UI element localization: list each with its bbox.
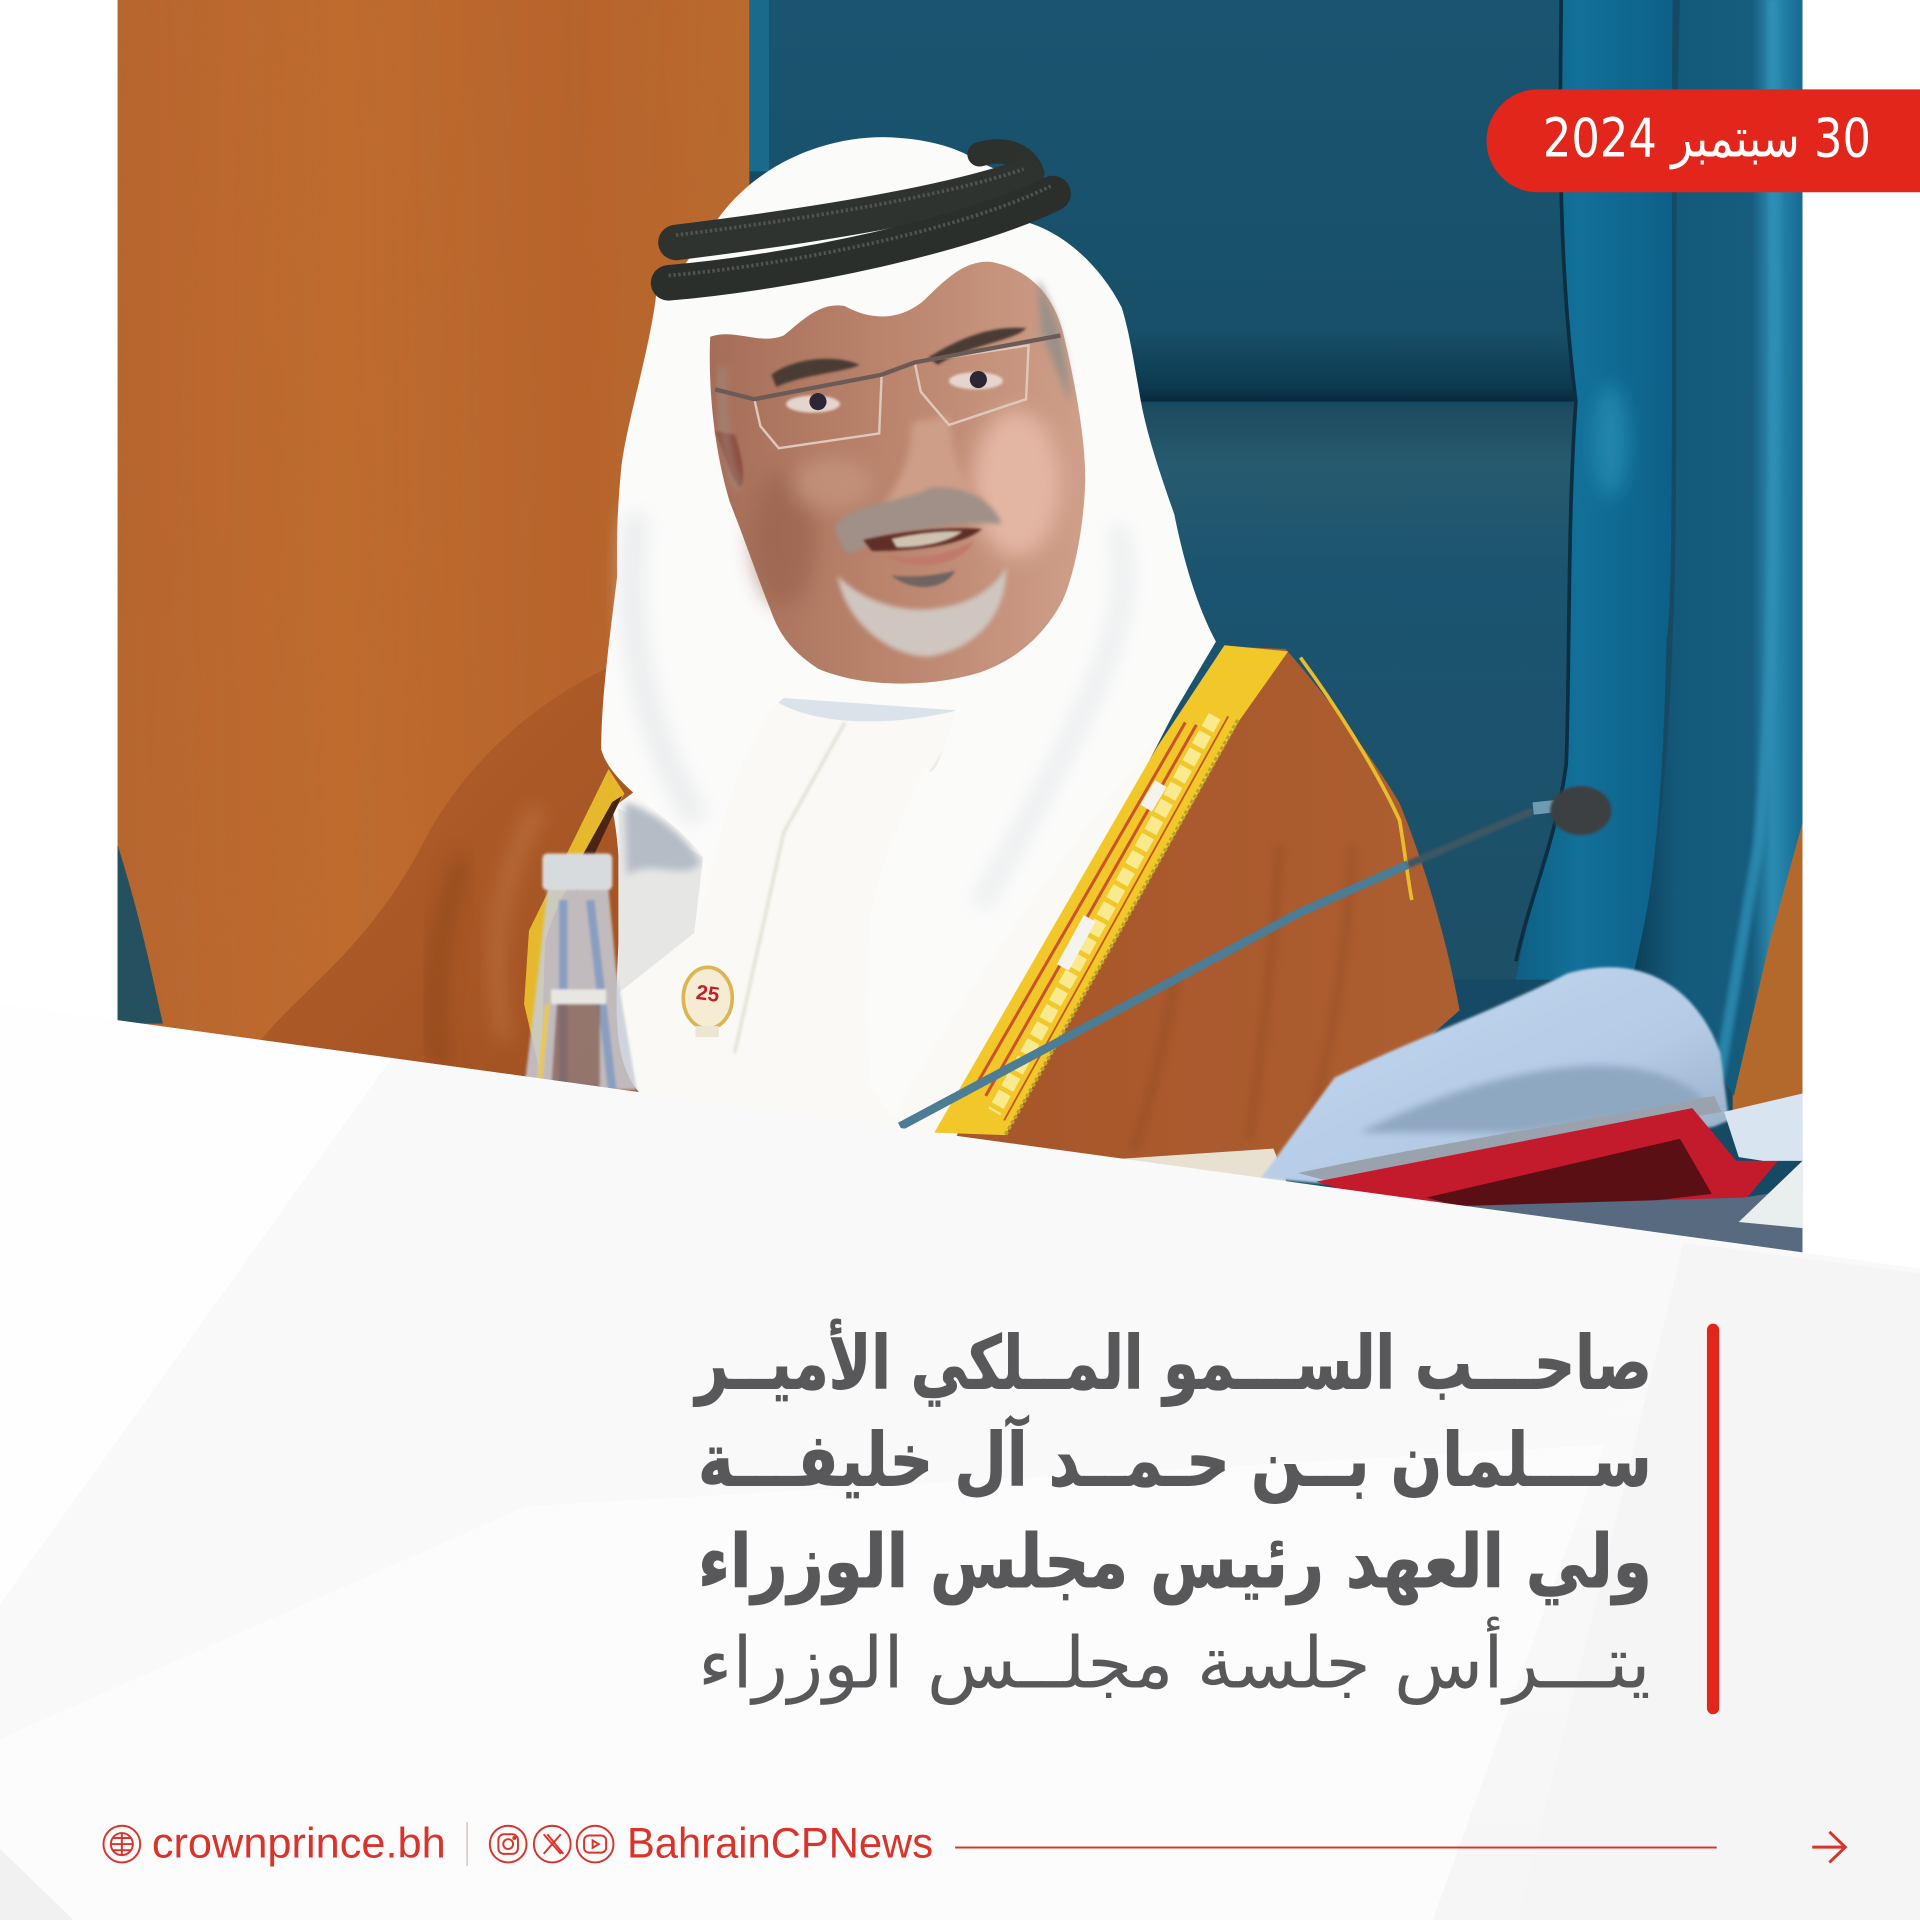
face — [710, 262, 1085, 684]
agal: black head cord — [669, 151, 1053, 283]
icon: globe — [103, 1826, 140, 1862]
brooch: 25 badge: 25 — [695, 981, 721, 1007]
icon: X — [534, 1826, 571, 1862]
wall: wood panel — [118, 0, 750, 1092]
website text: crownprince.bh — [152, 1820, 446, 1867]
beard and mouth — [835, 487, 1007, 656]
panel: lower light section — [0, 1004, 1920, 1920]
gold trim: right — [934, 645, 1288, 1135]
date text: 30 سبتمبر 2024 — [1543, 107, 1871, 170]
gold trim: left — [524, 769, 624, 1078]
icon: youtube — [577, 1826, 613, 1862]
subtitle line: يتـــرأس جلسة مجلــس الوزراء — [698, 1616, 1651, 1705]
brooch: 25 badge — [683, 967, 732, 1037]
photo: Crown Prince at cabinet session — [118, 0, 1802, 1273]
table and book — [1053, 967, 1802, 1273]
thobe: white garment — [613, 698, 1176, 1136]
water bottle — [524, 853, 637, 1090]
robe: brown bisht — [251, 647, 1460, 1163]
footer rule — [955, 1847, 1717, 1848]
chair — [118, 0, 1802, 1273]
icon: arrow — [1812, 1832, 1845, 1862]
title line 1: صاحـــب الســـمو المــلكي الأميــر — [692, 1319, 1652, 1407]
ghutra: white headscarf — [601, 137, 1216, 944]
divider — [467, 1822, 468, 1866]
icon: instagram — [490, 1826, 527, 1862]
social handle text: BahrainCPNews — [627, 1820, 933, 1867]
title line 3: ولي العهد رئيس مجلس الوزراء — [698, 1520, 1652, 1606]
footer bar — [103, 1820, 1845, 1867]
microphone — [900, 786, 1611, 1127]
title text block — [692, 1319, 1652, 1705]
date badge — [1487, 89, 1920, 192]
title line 2: ســـلمان بــن حـمــد آل خليفـــة — [698, 1414, 1652, 1503]
glasses and eyes — [715, 328, 1060, 448]
accent bar — [1707, 1324, 1719, 1714]
